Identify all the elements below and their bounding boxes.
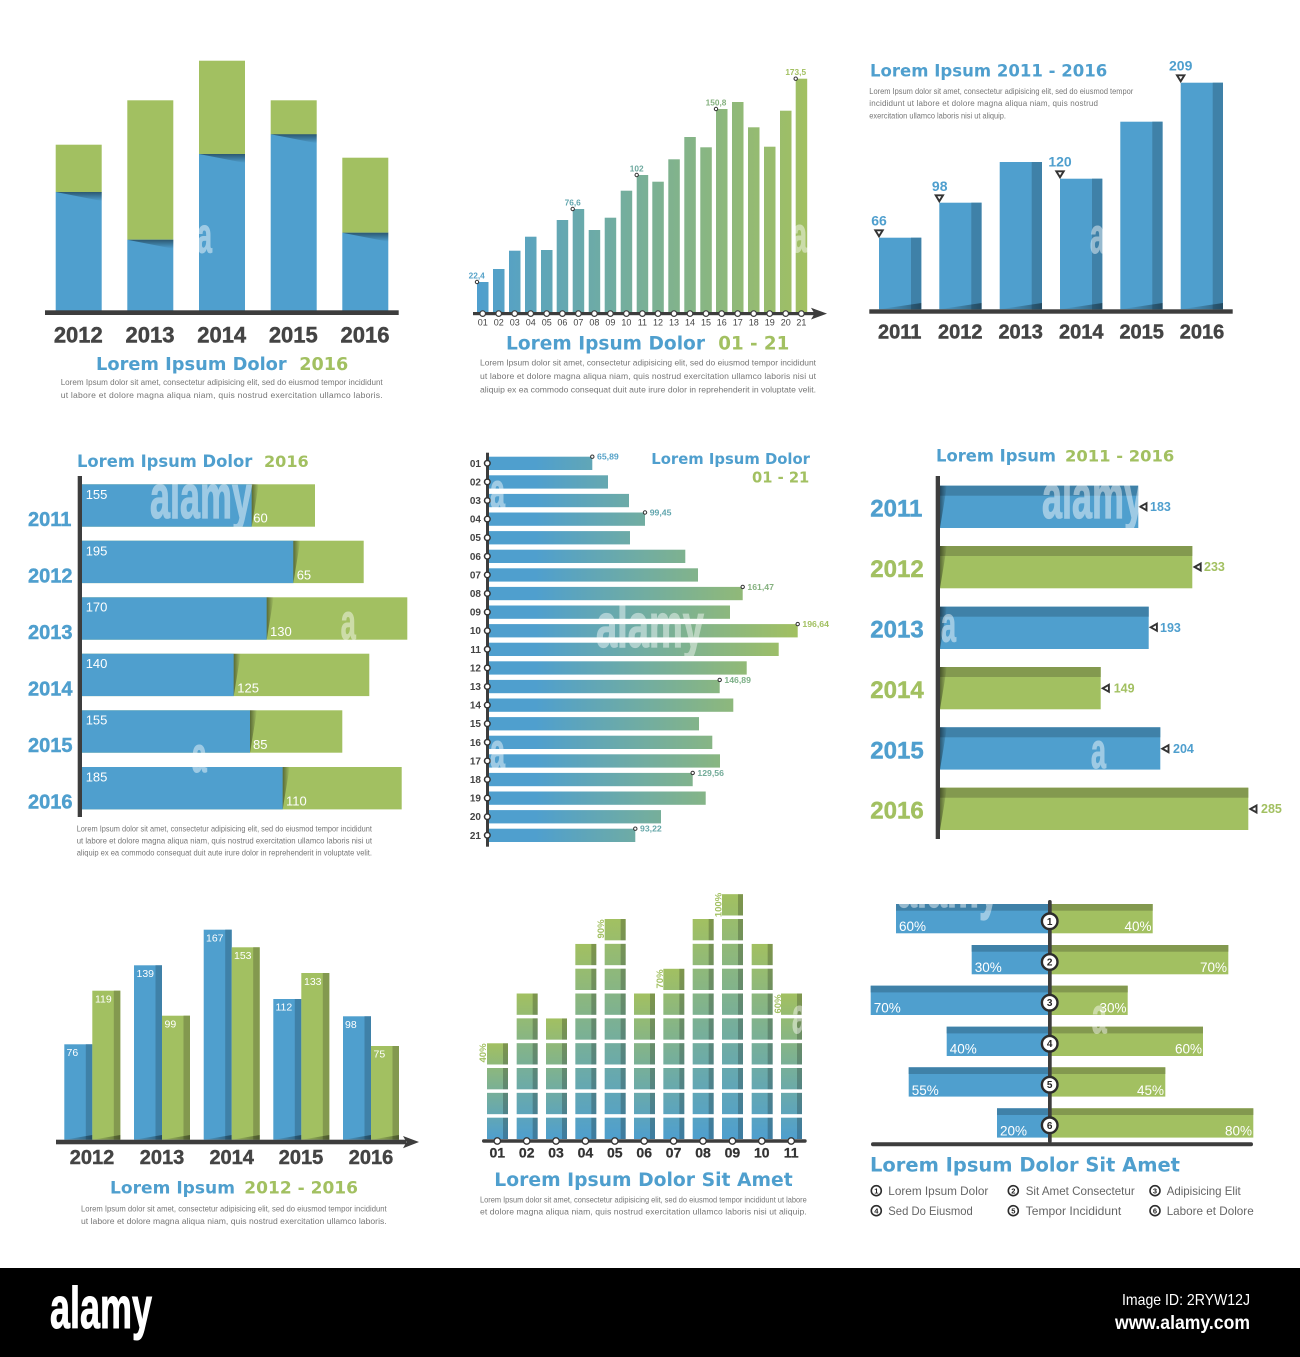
year labels: 2012 bbox=[54, 322, 103, 347]
value callouts: 173,5 bbox=[785, 67, 806, 77]
axis numbers: 04 bbox=[526, 318, 536, 328]
row numbers: 13 bbox=[470, 682, 481, 693]
year labels: 2012 bbox=[28, 566, 72, 588]
image id: Image ID: 2RYW12J bbox=[1122, 1292, 1250, 1309]
panel: grouped 3D columns 2012-2016 bbox=[56, 930, 419, 1226]
value markers bbox=[871, 58, 1193, 236]
column values: 76 bbox=[66, 1047, 78, 1059]
row numbers: 03 bbox=[470, 496, 481, 507]
bar values: 155 bbox=[86, 713, 107, 728]
value callouts bbox=[469, 67, 806, 284]
row numbers: 01 bbox=[470, 459, 481, 470]
row numbers: 02 bbox=[470, 477, 481, 488]
body text: ut labore et dolore magna aliqua niam, quis nostrud exercitation ullamco laboris nisi ut bbox=[480, 371, 817, 381]
panel: horizontal 3D bars with markers bbox=[870, 447, 1282, 839]
axis numbers: 10 bbox=[754, 1144, 770, 1160]
watermarks: a bbox=[490, 723, 506, 779]
heading: Lorem Ipsum Dolor bbox=[77, 452, 253, 471]
body text bbox=[480, 358, 817, 395]
year labels: 2016 bbox=[349, 1147, 393, 1169]
bar values bbox=[86, 487, 311, 809]
rotated percent labels: 60% bbox=[773, 994, 784, 1014]
legend: Sed Do Eiusmod bbox=[888, 1204, 973, 1218]
column values: 119 bbox=[95, 994, 112, 1006]
body text: et dolore magna aliqua niam, quis nostrud exercitation ullamco laboris nisi ut aliquip. bbox=[480, 1206, 807, 1216]
percent values: 55% bbox=[912, 1083, 939, 1098]
footer bar bbox=[0, 1268, 1300, 1357]
panel: gradient column chart 01-21 bbox=[469, 67, 827, 395]
value callouts: 65,89 bbox=[597, 452, 619, 462]
value markers: 193 bbox=[1160, 621, 1181, 635]
axis numbers: 05 bbox=[542, 318, 552, 328]
bar values: 110 bbox=[286, 794, 307, 809]
row numbers: 18 bbox=[470, 775, 481, 786]
rotated percent labels: 90% bbox=[596, 919, 607, 939]
axis numbers: 02 bbox=[519, 1144, 535, 1160]
rotated percent labels: 100% bbox=[714, 892, 724, 917]
value markers: 233 bbox=[1204, 560, 1225, 574]
row numbers: 11 bbox=[470, 645, 481, 656]
heading: 01 - 21 bbox=[752, 470, 809, 487]
watermarks: a bbox=[197, 208, 213, 264]
row numbers: 19 bbox=[470, 794, 481, 805]
year labels: 2012 bbox=[70, 1147, 114, 1169]
year labels: 2016 bbox=[1180, 321, 1224, 343]
3D columns bbox=[879, 83, 1223, 309]
body text: ut labore et dolore magna aliqua niam, quis nostrud exercitation ullamco laboris. bbox=[61, 390, 383, 400]
body text: Lorem Ipsum dolor sit amet, consectetur adipisicing elit, sed do eiusmod tempor bbox=[869, 87, 1134, 96]
axis numbers: 16 bbox=[717, 318, 727, 328]
bar values: 155 bbox=[86, 487, 107, 502]
percent values: 40% bbox=[1124, 919, 1152, 934]
body text: exercitation ullamco laboris nisi ut aliquip. bbox=[869, 111, 1006, 120]
bar values: 170 bbox=[86, 600, 107, 615]
axis numbers: 14 bbox=[685, 318, 695, 328]
watermarks: a bbox=[1092, 988, 1107, 1044]
gradient columns bbox=[477, 79, 807, 313]
body text: Lorem Ipsum dolor sit amet, consectetur adipisicing elit, sed do eiusmod tempor incididunt bbox=[77, 824, 373, 834]
axis arrow bbox=[56, 1136, 419, 1148]
axis with ticks bbox=[482, 1138, 807, 1144]
year labels bbox=[28, 509, 73, 814]
year labels: 2015 bbox=[269, 322, 318, 347]
row numbers: 10 bbox=[470, 626, 481, 637]
row numbers: 20 bbox=[470, 812, 481, 823]
value callouts: 146,89 bbox=[724, 675, 751, 685]
value markers: 209 bbox=[1169, 58, 1193, 74]
axis numbers: 01 bbox=[478, 318, 488, 328]
year labels: 2014 bbox=[870, 677, 924, 704]
axis numbers: 06 bbox=[557, 318, 567, 328]
year labels: 2013 bbox=[126, 322, 174, 347]
value callouts bbox=[591, 452, 829, 834]
heading: 01 - 21 bbox=[718, 333, 789, 354]
heading: 2016 bbox=[264, 452, 309, 471]
percent values bbox=[874, 919, 1252, 1138]
percent values: 60% bbox=[1175, 1042, 1202, 1057]
value markers: 149 bbox=[1114, 682, 1135, 696]
watermarks: a bbox=[1090, 208, 1106, 264]
panel: stacked horizontal bars 2011-2016 bbox=[28, 452, 407, 858]
value callouts: 99,45 bbox=[650, 508, 672, 518]
numbered markers bbox=[1042, 914, 1057, 1133]
value markers: 66 bbox=[871, 213, 887, 229]
numbered markers: 6 bbox=[1047, 1121, 1053, 1132]
axis numbers bbox=[490, 1144, 799, 1160]
value markers bbox=[1103, 500, 1282, 816]
axis numbers: 19 bbox=[765, 318, 775, 328]
heading: Lorem Ipsum Dolor bbox=[506, 333, 706, 354]
row numbers: 12 bbox=[470, 663, 481, 674]
watermarks: a bbox=[192, 727, 207, 783]
year labels: 2014 bbox=[209, 1147, 255, 1169]
row numbers bbox=[470, 459, 481, 842]
baseline axis bbox=[45, 310, 399, 315]
axis numbers: 02 bbox=[494, 318, 504, 328]
row numbers: 06 bbox=[470, 552, 481, 563]
heading: 2012 - 2016 bbox=[244, 1178, 358, 1198]
axis numbers: 08 bbox=[695, 1144, 711, 1160]
body text bbox=[480, 1195, 807, 1216]
stacked bars bbox=[82, 484, 407, 809]
value callouts: 129,56 bbox=[697, 768, 724, 778]
legend: Labore et Dolore bbox=[1167, 1204, 1254, 1218]
body text: Lorem Ipsum dolor sit amet, consectetur adipisicing elit, sed do eiusmod tempor incididunt bbox=[81, 1204, 387, 1214]
column values: 75 bbox=[374, 1048, 385, 1060]
legend bbox=[871, 1184, 1254, 1218]
value markers: 183 bbox=[1150, 500, 1171, 514]
body text: Lorem Ipsum dolor sit amet, consectetur adipisicing elit, sed do eiusmod tempor incididunt bbox=[480, 358, 817, 368]
bar values: 195 bbox=[86, 543, 107, 558]
heading: Lorem Ipsum bbox=[936, 447, 1056, 466]
year labels: 2015 bbox=[28, 735, 72, 757]
numbered markers: 3 bbox=[1047, 998, 1053, 1009]
year labels: 2015 bbox=[279, 1147, 323, 1169]
watermarks: a bbox=[941, 597, 957, 653]
rotated percent labels: 40% bbox=[478, 1043, 489, 1063]
body text: Lorem Ipsum dolor sit amet, consectetur adipisicing elit, sed do eiusmod tempor incididunt ut labore bbox=[480, 1195, 807, 1205]
year labels: 2014 bbox=[1059, 321, 1104, 343]
row numbers: 14 bbox=[470, 701, 481, 712]
axis numbers: 21 bbox=[796, 318, 806, 328]
body text: ut labore et dolore magna aliqua niam, quis nostrud exercitation ullamco laboris. bbox=[81, 1216, 387, 1226]
numbered markers: 4 bbox=[1047, 1039, 1053, 1050]
axis numbers: 15 bbox=[701, 318, 711, 328]
axis numbers: 05 bbox=[607, 1144, 623, 1160]
column values: 99 bbox=[164, 1018, 176, 1030]
row numbers: 08 bbox=[470, 589, 481, 600]
year labels: 2013 bbox=[998, 321, 1043, 343]
legend: 4 bbox=[874, 1206, 879, 1215]
watermarks: a bbox=[1091, 723, 1107, 779]
heading: Lorem Ipsum Dolor bbox=[651, 451, 811, 468]
column values: 112 bbox=[276, 1002, 292, 1014]
value callouts: 102 bbox=[630, 164, 644, 174]
stacked columns bbox=[56, 61, 388, 311]
heading: 2016 bbox=[299, 355, 348, 375]
year labels: 2014 bbox=[197, 322, 247, 347]
year labels: 2015 bbox=[870, 737, 924, 764]
axis numbers: 08 bbox=[589, 318, 599, 328]
percent values: 30% bbox=[1099, 1001, 1126, 1016]
vertical axis bbox=[78, 476, 82, 817]
year labels: 2013 bbox=[28, 622, 72, 644]
axis numbers: 09 bbox=[605, 318, 615, 328]
axis numbers: 12 bbox=[653, 318, 663, 328]
body text bbox=[77, 824, 373, 858]
year labels bbox=[70, 1147, 393, 1169]
year labels: 2012 bbox=[870, 556, 924, 583]
heading bbox=[110, 1178, 358, 1198]
column values: 133 bbox=[304, 976, 322, 988]
watermarks: a bbox=[792, 207, 808, 263]
rotated percent labels: 70% bbox=[655, 969, 666, 989]
watermarks bbox=[150, 207, 1144, 1044]
vertical axis with ticks bbox=[484, 453, 490, 847]
percent values: 30% bbox=[975, 960, 1002, 975]
year labels bbox=[54, 322, 389, 347]
body text: incididunt ut labore et dolore magna aliqua niam, quis nostrud bbox=[869, 99, 1098, 108]
legend: Tempor Incididunt bbox=[1026, 1204, 1122, 1218]
panel: stacked tile columns 01-11 bbox=[478, 892, 807, 1216]
body text: aliquip ex ea commodo consequat duit aute irure dolor in reprehenderit in voluptate velit. bbox=[480, 385, 816, 395]
row numbers: 21 bbox=[470, 831, 481, 842]
value callouts: 196,64 bbox=[802, 619, 829, 629]
bar values: 125 bbox=[237, 680, 259, 695]
value callouts: 22,4 bbox=[469, 270, 485, 280]
year labels: 2014 bbox=[28, 679, 73, 701]
percent values: 60% bbox=[899, 919, 926, 934]
website: www.alamy.com bbox=[1114, 1313, 1250, 1334]
panel: gradient horizontal bars 01-21 bbox=[470, 451, 829, 847]
legend: Sit Amet Consectetur bbox=[1026, 1184, 1135, 1198]
year labels: 2016 bbox=[341, 322, 389, 347]
bar values: 130 bbox=[270, 624, 292, 639]
legend: 1 bbox=[874, 1186, 878, 1195]
heading: Lorem Ipsum 2011 - 2016 bbox=[870, 62, 1107, 81]
column values: 153 bbox=[234, 950, 252, 962]
row numbers: 17 bbox=[470, 756, 481, 767]
legend: Lorem Ipsum Dolor bbox=[888, 1184, 988, 1198]
row numbers: 05 bbox=[470, 533, 481, 544]
value callouts: 93,22 bbox=[640, 824, 662, 834]
bar values: 140 bbox=[86, 656, 107, 671]
row numbers: 09 bbox=[470, 608, 481, 619]
axis numbers: 11 bbox=[784, 1144, 799, 1160]
numbered markers: 5 bbox=[1047, 1080, 1053, 1091]
watermarks: a bbox=[792, 988, 808, 1044]
body text bbox=[81, 1204, 387, 1226]
butterfly bars bbox=[871, 904, 1253, 1138]
year labels bbox=[878, 321, 1224, 343]
year labels: 2016 bbox=[28, 792, 72, 814]
axis numbers: 03 bbox=[548, 1144, 564, 1160]
legend: 6 bbox=[1153, 1206, 1157, 1215]
numbered markers: 2 bbox=[1047, 958, 1053, 968]
value markers: 98 bbox=[932, 178, 948, 194]
year labels: 2013 bbox=[870, 616, 924, 643]
year labels: 2012 bbox=[938, 321, 983, 343]
bar values: 65 bbox=[297, 567, 311, 582]
row numbers: 07 bbox=[470, 570, 481, 581]
axis numbers: 04 bbox=[578, 1144, 593, 1160]
baseline axis bbox=[869, 309, 1233, 314]
axis numbers: 13 bbox=[669, 318, 679, 328]
bar values: 185 bbox=[86, 769, 107, 784]
panel: 3D column chart 2011-2016 bbox=[869, 58, 1233, 343]
footer logo: alamy bbox=[50, 1276, 152, 1341]
heading: Lorem Ipsum Dolor Sit Amet bbox=[494, 1170, 793, 1191]
watermarks: alamy bbox=[150, 463, 252, 532]
axis numbers: 18 bbox=[749, 318, 759, 328]
year labels: 2016 bbox=[870, 797, 924, 824]
bars bbox=[940, 486, 1248, 830]
year labels: 2015 bbox=[1119, 321, 1164, 343]
year labels: 2011 bbox=[870, 496, 922, 523]
year labels: 2013 bbox=[140, 1147, 184, 1169]
vertical axis bbox=[936, 476, 940, 839]
value callouts: 76,6 bbox=[565, 198, 581, 208]
value markers: 285 bbox=[1261, 802, 1282, 816]
value markers: 120 bbox=[1048, 154, 1072, 170]
year labels: 2011 bbox=[28, 509, 71, 531]
axis arrow with ticks bbox=[473, 308, 827, 320]
value callouts: 161,47 bbox=[747, 582, 774, 592]
panel: stacked column chart 2012-2016 bbox=[45, 61, 399, 400]
heading bbox=[936, 447, 1174, 466]
axis numbers: 07 bbox=[666, 1144, 682, 1160]
legend: 2 bbox=[1011, 1186, 1015, 1195]
watermarks: a bbox=[490, 463, 506, 519]
percent values: 80% bbox=[1225, 1124, 1252, 1138]
axis numbers: 10 bbox=[621, 318, 631, 328]
percent values: 70% bbox=[874, 1001, 901, 1016]
column values bbox=[66, 932, 385, 1060]
axis numbers: 03 bbox=[510, 318, 520, 328]
grouped columns bbox=[64, 930, 399, 1140]
body text bbox=[869, 87, 1134, 120]
body text: aliquip ex ea commodo consequat duit aute irure dolor in reprehenderit in voluptate velit. bbox=[77, 848, 372, 858]
heading bbox=[651, 451, 811, 487]
tile columns bbox=[486, 894, 803, 1139]
column values: 98 bbox=[345, 1019, 357, 1031]
percent values: 45% bbox=[1137, 1083, 1164, 1098]
year labels: 2011 bbox=[878, 321, 921, 343]
column values: 139 bbox=[136, 968, 154, 980]
axis numbers: 01 bbox=[490, 1144, 505, 1160]
numbered markers: 1 bbox=[1047, 917, 1053, 928]
row numbers: 16 bbox=[470, 738, 481, 749]
value markers: 204 bbox=[1173, 742, 1194, 756]
axis numbers bbox=[478, 318, 806, 328]
axis numbers: 11 bbox=[638, 318, 647, 328]
value callouts: 150,8 bbox=[706, 98, 727, 108]
axis numbers: 20 bbox=[781, 318, 791, 328]
watermarks: a bbox=[341, 594, 356, 650]
body text: Lorem Ipsum dolor sit amet, consectetur adipisicing elit, sed do eiusmod tempor incididunt bbox=[61, 377, 383, 387]
column values: 167 bbox=[206, 932, 224, 944]
axis numbers: 06 bbox=[636, 1144, 652, 1160]
gradient bars bbox=[489, 457, 798, 842]
body text bbox=[61, 377, 383, 400]
body text: ut labore et dolore magna aliqua niam, quis nostrud exercitation ullamco laboris nisi ut bbox=[77, 836, 373, 846]
watermarks: alamy bbox=[897, 852, 999, 921]
row numbers: 04 bbox=[470, 515, 481, 526]
watermarks: alamy bbox=[596, 592, 704, 661]
heading: Lorem Ipsum Dolor bbox=[96, 354, 287, 375]
row numbers: 15 bbox=[470, 719, 481, 730]
rotated percent labels bbox=[478, 892, 784, 1063]
axis numbers: 09 bbox=[725, 1144, 740, 1160]
percent values: 40% bbox=[950, 1042, 977, 1057]
bar values: 85 bbox=[253, 737, 267, 752]
legend: 3 bbox=[1153, 1186, 1157, 1195]
heading: 2011 - 2016 bbox=[1065, 447, 1174, 466]
axis numbers: 17 bbox=[733, 318, 743, 328]
percent values: 20% bbox=[1000, 1124, 1027, 1138]
legend: 5 bbox=[1011, 1206, 1015, 1215]
watermarks: alamy bbox=[1042, 463, 1144, 532]
axis numbers: 07 bbox=[573, 318, 583, 328]
legend: Adipisicing Elit bbox=[1167, 1184, 1241, 1198]
heading: Lorem Ipsum bbox=[110, 1178, 235, 1198]
percent values: 70% bbox=[1200, 960, 1227, 975]
bar values: 60 bbox=[253, 511, 268, 526]
year labels bbox=[870, 496, 924, 824]
panel: butterfly bars 1-6 bbox=[870, 900, 1254, 1218]
heading: Lorem Ipsum Dolor Sit Amet bbox=[870, 1154, 1180, 1177]
axes bbox=[871, 900, 1253, 1146]
